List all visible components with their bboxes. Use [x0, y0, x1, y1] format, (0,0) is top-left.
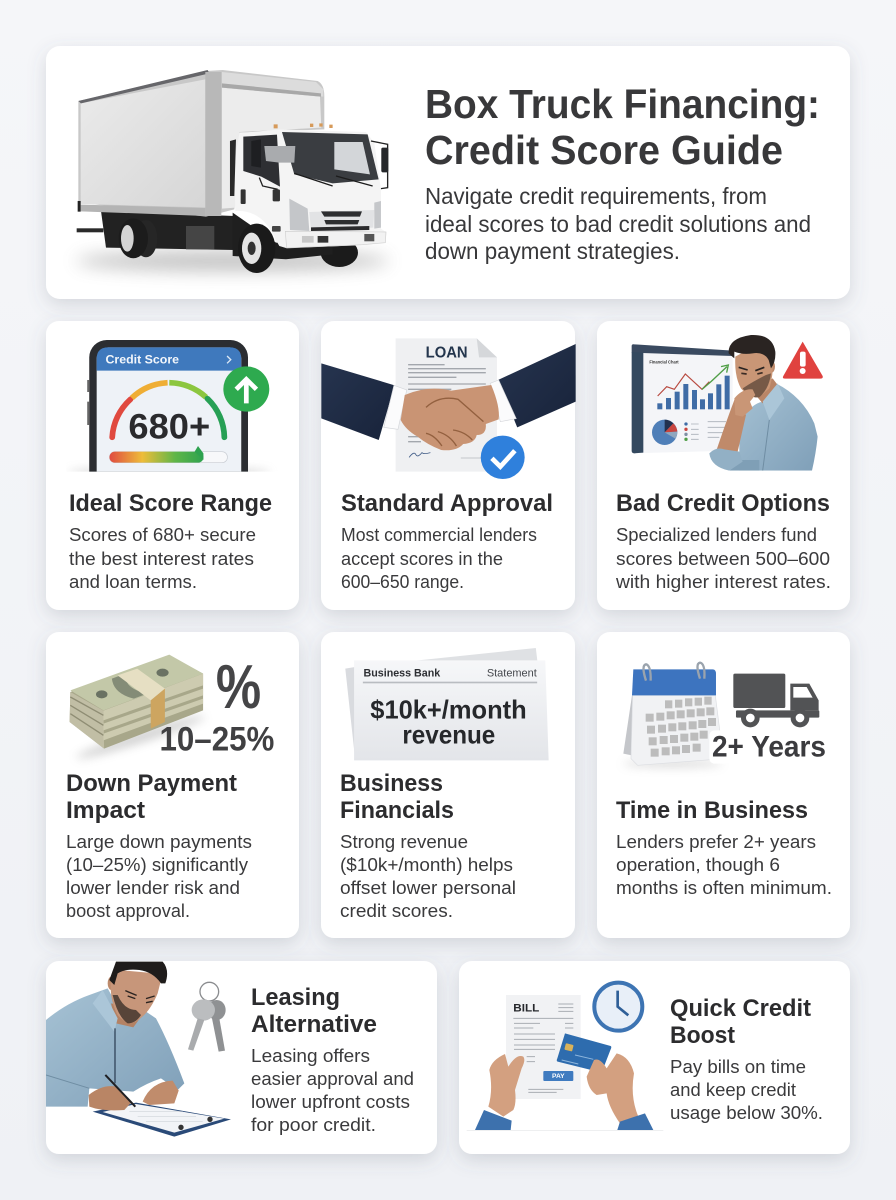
illustration: hands with bill, card and clock	[467, 983, 663, 1131]
heading: Financials	[340, 797, 454, 824]
body text: Leasing offers	[251, 1045, 370, 1066]
body text: and keep credit	[670, 1079, 797, 1100]
illustration: bank statement: $10k+/month	[370, 697, 527, 725]
illustration: stack of cash with percent: 10–25%	[160, 721, 274, 758]
panel: ideal score range	[46, 321, 299, 610]
body text: Most commercial lenders	[341, 524, 537, 545]
heading: Boost	[670, 1022, 735, 1049]
body text	[670, 1056, 823, 1123]
subtitle: Navigate credit requirements, from	[425, 183, 767, 209]
panel: standard approval	[321, 321, 576, 610]
body text: Scores of 680+ secure	[69, 524, 256, 545]
illustration: calendar, truck and 2+ years	[623, 663, 829, 767]
body text: 600–650 range.	[341, 571, 464, 592]
panel: bad credit options	[597, 321, 850, 610]
body text: (10–25%) significantly	[66, 854, 249, 875]
panel: business financials	[321, 632, 575, 938]
body text: Pay bills on time	[670, 1056, 806, 1077]
subtitle: ideal scores to bad credit solutions and	[425, 211, 811, 237]
subtitle: down payment strategies.	[425, 238, 680, 264]
panel: header	[46, 46, 850, 299]
body text	[69, 524, 256, 592]
heading	[670, 995, 811, 1049]
body text: operation, though 6	[616, 854, 780, 875]
body text: ($10k+/month) helps	[340, 854, 513, 875]
body text: Specialized lenders fund	[616, 524, 817, 545]
illustration: calendar, truck and 2+ years: 2+ Years	[712, 731, 826, 764]
panel: quick credit boost	[459, 961, 850, 1154]
panel: time in business	[597, 632, 850, 938]
panel: leasing alternative	[46, 961, 437, 1154]
illustration: bank statement: revenue	[402, 722, 495, 750]
body text: offset lower personal	[340, 877, 516, 898]
body text: Large down payments	[66, 831, 252, 852]
body text: for poor credit.	[251, 1114, 376, 1135]
title: Box Truck Financing:	[425, 81, 820, 127]
illustration: stack of cash with percent	[70, 653, 274, 763]
body text: lower lender risk and	[66, 877, 240, 898]
illustration: phone with credit score gauge	[72, 340, 270, 472]
illustration: white box truck	[76, 70, 389, 273]
body text: scores between 500–600	[616, 548, 830, 569]
body text: months is often minimum.	[616, 877, 832, 898]
body text	[616, 831, 832, 898]
heading: Down Payment	[66, 770, 237, 797]
illustration: hands with bill, card and clock: BILL	[513, 1003, 539, 1015]
body text: and loan terms.	[69, 571, 197, 592]
illustration: hands with bill, card and clock: PAY	[552, 1074, 565, 1080]
body text	[341, 524, 537, 592]
illustration: phone with credit score gauge: 680+	[128, 407, 210, 447]
subtitle	[425, 183, 811, 264]
title	[425, 81, 820, 173]
illustration: bank statement: Business Bank	[364, 667, 440, 679]
heading: Alternative	[251, 1011, 377, 1038]
illustration: worried man with financial chart: Financial Chart	[649, 360, 679, 366]
heading: Business	[340, 770, 443, 797]
heading	[340, 770, 454, 824]
panel: down payment impact	[46, 632, 299, 938]
illustration: handshake over loan document	[321, 338, 576, 479]
body text: accept scores in the	[341, 548, 503, 569]
illustration: bank statement	[345, 648, 549, 760]
body text: Lenders prefer 2+ years	[616, 831, 816, 852]
illustration: man signing lease with keys	[46, 962, 231, 1137]
illustration: worried man with financial chart	[632, 335, 823, 471]
body text: the best interest rates	[69, 548, 254, 569]
illustration: bank statement: Statement	[487, 667, 537, 679]
body text	[251, 1045, 414, 1135]
illustration: phone with credit score gauge: Credit Score	[105, 353, 179, 367]
body text: credit scores.	[340, 900, 453, 921]
heading	[251, 984, 377, 1038]
body text: usage below 30%.	[670, 1102, 823, 1123]
illustration: stack of cash with percent: %	[216, 653, 261, 722]
title: Credit Score Guide	[425, 127, 783, 173]
heading: Quick Credit	[670, 995, 811, 1022]
heading: Bad Credit Options	[616, 490, 830, 517]
heading: Leasing	[251, 984, 340, 1011]
body text	[66, 831, 252, 921]
heading: Time in Business	[616, 797, 808, 824]
body text: lower upfront costs	[251, 1091, 410, 1112]
heading: Impact	[66, 797, 145, 824]
heading	[66, 770, 237, 824]
body text: boost approval.	[66, 900, 190, 921]
heading: Ideal Score Range	[69, 490, 272, 517]
body text: Strong revenue	[340, 831, 468, 852]
body text	[340, 831, 516, 921]
body text	[615, 524, 831, 592]
heading: Standard Approval	[341, 490, 553, 517]
body text: with higher interest rates.	[615, 571, 831, 592]
illustration: handshake over loan document: LOAN	[426, 345, 468, 362]
body text: easier approval and	[251, 1068, 414, 1089]
